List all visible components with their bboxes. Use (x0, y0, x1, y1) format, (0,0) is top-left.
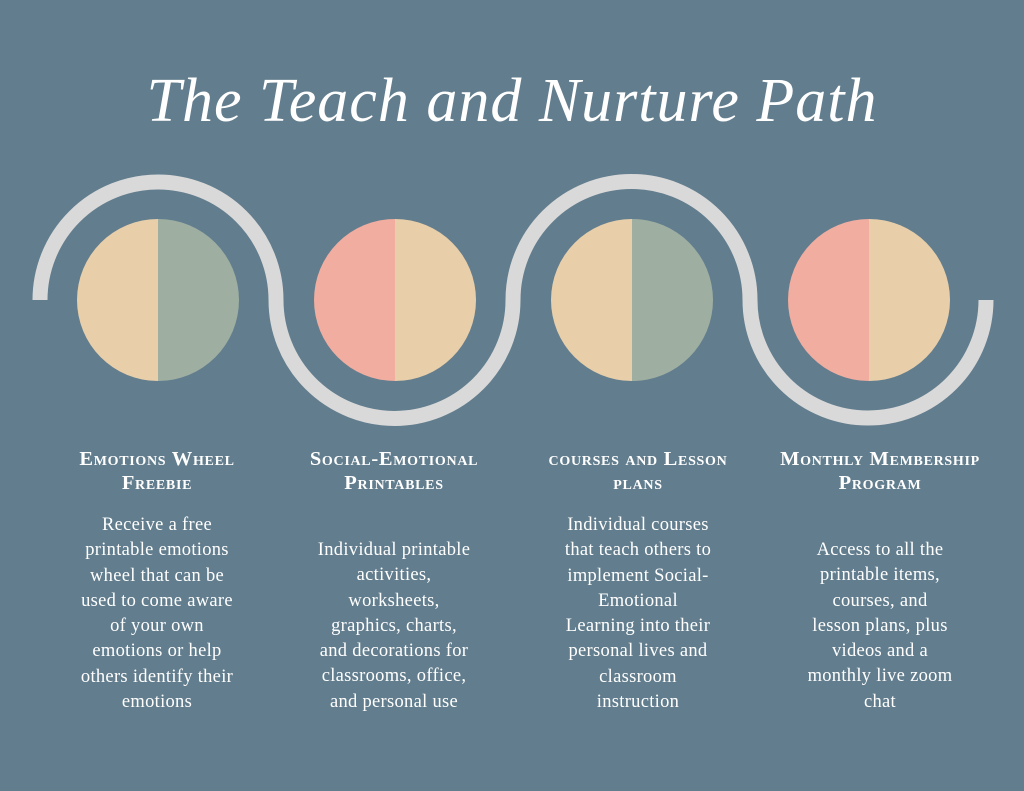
text 3 (565, 515, 711, 712)
text 2: graphics, charts, (331, 616, 457, 636)
text 2: and personal use (330, 692, 458, 712)
text 2: Individual printable (318, 540, 470, 560)
text 3: instruction (597, 692, 679, 712)
text 1: emotions (122, 692, 192, 712)
text 4: courses, and (832, 591, 928, 611)
text 2: and decorations for (320, 641, 468, 661)
heading 1: Emotions Wheel (79, 448, 235, 470)
text 3: Emotional (598, 591, 678, 611)
text 1: others identify their (81, 667, 233, 687)
heading 1: Freebie (122, 472, 192, 494)
text 2: worksheets, (348, 591, 440, 611)
text 3: that teach others to (565, 540, 711, 560)
heading 4: Program (839, 472, 921, 494)
heading 3 (549, 448, 727, 494)
heading 2: Social-Emotional (310, 448, 478, 470)
text 2: activities, (357, 565, 431, 585)
heading 3: plans (613, 472, 663, 494)
column 1 (79, 448, 235, 712)
text 2 (318, 540, 470, 712)
heading 4: Monthly Membership (780, 448, 980, 470)
circle 2 (314, 219, 476, 381)
wave (40, 182, 986, 418)
text 3: Learning into their (566, 616, 710, 636)
text 3: Individual courses (567, 515, 709, 535)
heading 1 (79, 448, 235, 494)
text 4 (808, 540, 952, 712)
column 2 (310, 448, 478, 712)
text 1: used to come aware (81, 591, 233, 611)
column 3 (549, 448, 727, 712)
text 4: videos and a (832, 641, 928, 661)
text 4: Access to all the (817, 540, 943, 560)
text 3: classroom (599, 667, 677, 687)
text 3: implement Social- (567, 566, 709, 586)
text 4: printable items, (820, 565, 940, 585)
text 1: Receive a free (102, 515, 212, 535)
text 1: wheel that can be (90, 566, 224, 586)
circle 4 (788, 219, 950, 381)
text 3: personal lives and (568, 641, 707, 661)
text 1: of your own (110, 616, 204, 636)
text 1: printable emotions (85, 540, 229, 560)
circle 1 (77, 219, 239, 381)
text 4: chat (864, 692, 896, 712)
text 4: lesson plans, plus (812, 616, 948, 636)
circle 3 (551, 219, 713, 381)
text 4: monthly live zoom (808, 666, 952, 686)
heading 3: courses and Lesson (549, 448, 727, 470)
heading 2 (310, 448, 478, 494)
heading 4 (780, 448, 980, 494)
column 4 (780, 448, 980, 712)
text 1: emotions or help (92, 641, 222, 661)
text 2: classrooms, office, (322, 666, 466, 686)
heading 2: Printables (344, 472, 444, 494)
text 1 (81, 515, 233, 712)
title: The Teach and Nurture Path (146, 67, 877, 135)
